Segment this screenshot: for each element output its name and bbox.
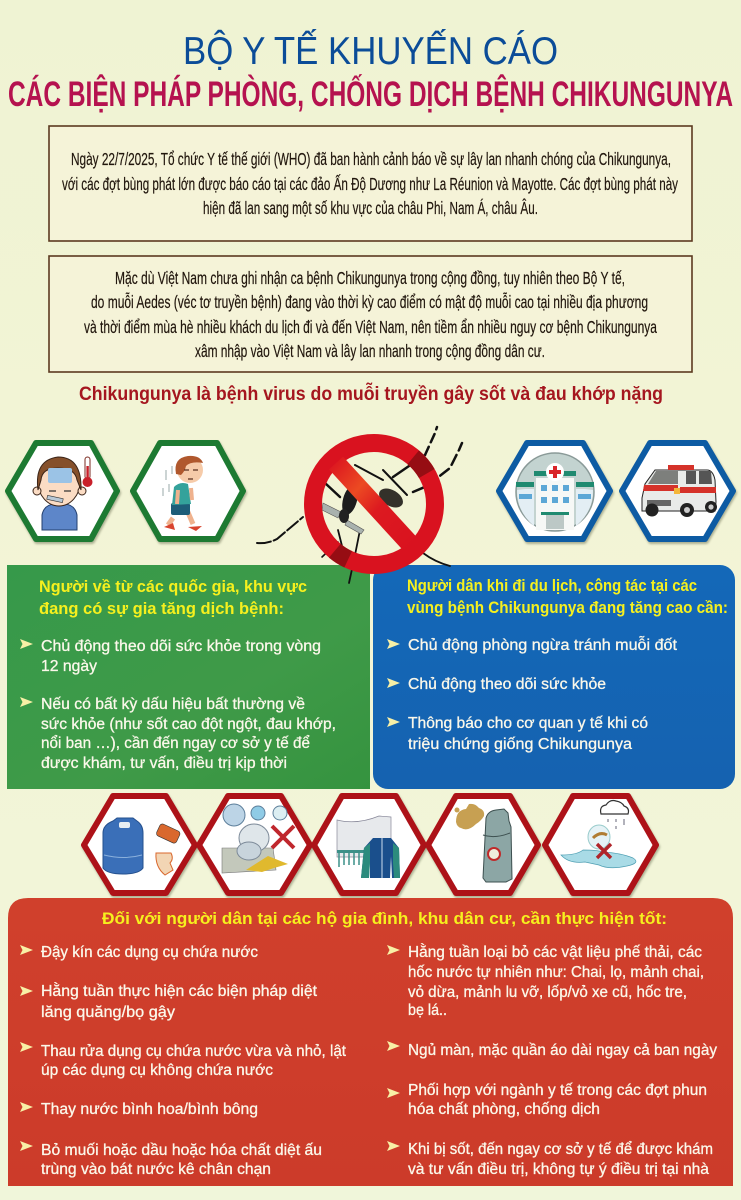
panel: households bbox=[8, 898, 733, 1186]
text box: Vietnam risk: xâm nhập vào Việt Nam và lây lan nhanh trong cộng đồng dân cư. bbox=[195, 341, 545, 361]
green list: sức khỏe (như sốt cao đột ngột, đau khớp, bbox=[41, 716, 336, 733]
icon: discarded containers bbox=[199, 796, 310, 893]
right list: Phối hợp với ngành y tế trong các đợt phun bbox=[408, 1082, 707, 1099]
blue list: Thông báo cho cơ quan y tế khi có bbox=[408, 715, 648, 732]
icon: no standing water bbox=[545, 796, 656, 893]
icon: hospital bbox=[499, 443, 610, 539]
text box: WHO warning bbox=[49, 126, 692, 241]
left list: Hằng tuần thực hiện các biện pháp diệt bbox=[41, 983, 318, 1000]
text box: Vietnam risk bbox=[49, 256, 692, 372]
blue heading: Người dân khi đi du lịch, công tác tại các bbox=[407, 577, 697, 595]
icon: water tank and brush bbox=[84, 796, 195, 893]
green list: Chủ động theo dõi sức khỏe trong vòng bbox=[41, 638, 321, 655]
icon: mosquito with prohibition sign bbox=[257, 427, 462, 583]
blue list: triệu chứng giống Chikungunya bbox=[408, 736, 632, 753]
subtitle: Chikungunya là bệnh virus do muỗi truyền gây sốt và đau khớp nặng bbox=[79, 381, 663, 405]
green heading: đang có sự gia tăng dịch bệnh: bbox=[39, 600, 284, 618]
icon: boy with fever bbox=[8, 443, 117, 539]
green list: 12 ngày bbox=[41, 658, 97, 675]
blue list bbox=[387, 637, 678, 753]
right list: hốc nước tự nhiên như: Chai, lọ, mảnh chai, bbox=[408, 964, 704, 981]
right list: vỏ dừa, mảnh lu vỡ, lốp/vỏ xe cũ, hốc tre, bbox=[408, 984, 687, 1001]
icon: insect spray bbox=[428, 796, 538, 893]
red heading: Đối với người dân tại các hộ gia đình, khu dân cư, cần thực hiện tốt: bbox=[102, 910, 667, 928]
green list: được khám, tư vấn, điều trị kịp thời bbox=[41, 755, 287, 772]
right list: và tư vấn điều trị, không tự ý điều trị tại nhà bbox=[408, 1161, 709, 1178]
green list: nổi ban …), cần đến ngay cơ sở y tế để bbox=[41, 735, 310, 752]
blue heading bbox=[407, 577, 728, 617]
panel: returning travellers bbox=[7, 565, 370, 789]
right list bbox=[387, 944, 717, 1178]
left list: Thau rửa dụng cụ chứa nước vừa và nhỏ, lật bbox=[41, 1043, 347, 1060]
right list: bẹ lá.. bbox=[408, 1002, 447, 1019]
left list: úp các dụng cụ không chứa nước bbox=[41, 1062, 273, 1079]
title: BỘ Y TẾ KHUYẾN CÁO bbox=[183, 29, 558, 73]
right list: Hằng tuần loại bỏ các vật liệu phế thải, các bbox=[408, 944, 702, 961]
green list: Nếu có bất kỳ dấu hiệu bất thường về bbox=[41, 696, 305, 713]
green list bbox=[20, 638, 336, 772]
icon: mosquito net and long clothes bbox=[314, 796, 424, 893]
icon: tired boy bbox=[133, 443, 243, 539]
blue list: Chủ động phòng ngừa tránh muỗi đốt bbox=[408, 637, 678, 654]
right list: hóa chất phòng, chống dịch bbox=[408, 1101, 600, 1118]
left list: lăng quăng/bọ gậy bbox=[41, 1004, 175, 1021]
icon: ambulance bbox=[622, 443, 733, 539]
left list: Đậy kín các dụng cụ chứa nước bbox=[41, 944, 258, 961]
left list: trùng vào bát nước kê chân chạn bbox=[41, 1161, 271, 1178]
green heading: Người về từ các quốc gia, khu vực bbox=[39, 578, 307, 596]
right list: Khi bị sốt, đến ngay cơ sở y tế để được khám bbox=[408, 1141, 713, 1158]
title bbox=[8, 29, 733, 114]
left list: Bỏ muối hoặc dầu hoặc hóa chất diệt ấu bbox=[41, 1142, 322, 1159]
text box: WHO warning: hiện đã lan sang một số khu vực của châu Phi, Nam Á, châu Âu. bbox=[203, 198, 538, 218]
green heading bbox=[39, 578, 307, 618]
left list bbox=[20, 944, 347, 1178]
blue list: Chủ động theo dõi sức khỏe bbox=[408, 676, 606, 693]
left list: Thay nước bình hoa/bình bông bbox=[41, 1101, 258, 1118]
right list: Ngủ màn, mặc quần áo dài ngay cả ban ngày bbox=[408, 1042, 717, 1059]
panel: people travelling bbox=[373, 565, 735, 789]
